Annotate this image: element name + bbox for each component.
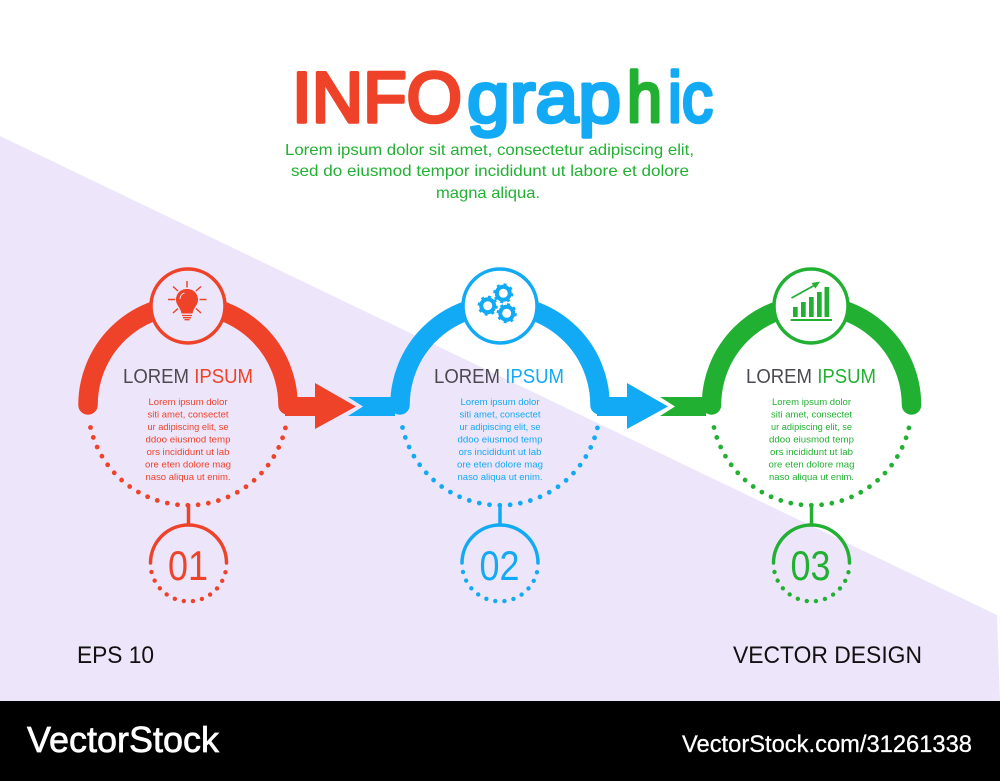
dotted lower arc xyxy=(90,428,286,505)
body text: ddoo eiusmod temp xyxy=(146,434,230,446)
arc: red thick semicircle xyxy=(88,305,288,405)
heading: lorem ipsum: LOREM IPSUM xyxy=(434,365,564,388)
number badge 02: 02 xyxy=(480,542,520,589)
footer bar xyxy=(0,701,1000,781)
dotted lower arc xyxy=(714,428,909,505)
number badge 02 xyxy=(462,504,538,601)
body text: siti amet, consectet xyxy=(460,410,541,420)
body text: Lorem ipsum dolor xyxy=(148,397,228,408)
body text: siti amet, consectet xyxy=(148,410,229,420)
panel: step 01 xyxy=(88,269,356,601)
number badge 01 xyxy=(150,504,226,601)
body text: ors incididunt ut lab xyxy=(458,447,542,458)
title: INFO xyxy=(292,59,462,138)
body text xyxy=(457,397,543,483)
arrow: blue head xyxy=(597,383,668,429)
arc: blue thick semicircle xyxy=(400,305,600,405)
subtitle text xyxy=(285,142,694,202)
title: ic xyxy=(668,59,713,138)
dotted lower arc xyxy=(402,428,598,505)
arrow: red xyxy=(285,383,356,429)
arrow: blue tail xyxy=(348,397,395,416)
title: grap xyxy=(467,59,621,138)
body text: Lorem ipsum dolor xyxy=(772,397,851,408)
body text: naso aliqua ut enim. xyxy=(146,472,230,483)
panel: step 02 xyxy=(348,269,668,601)
icon: growth chart xyxy=(774,269,848,343)
number badge 03 xyxy=(774,504,850,601)
body text: Lorem ipsum dolor xyxy=(460,397,540,408)
title xyxy=(292,59,713,138)
body text xyxy=(768,397,854,483)
subtitle text: magna aliqua. xyxy=(436,185,540,202)
label: EPS 10: EPS 10 xyxy=(77,642,154,669)
subtitle text: Lorem ipsum dolor sit amet, consectetur adipiscing elit, xyxy=(285,142,694,159)
icon: light bulb xyxy=(151,269,225,343)
body text xyxy=(145,397,231,483)
footer url text: VectorStock.com/31261338 xyxy=(682,731,972,758)
label: vector design: VECTOR DESIGN xyxy=(733,642,922,669)
number badge 01: 01 xyxy=(168,542,208,589)
number badge 03: 03 xyxy=(790,542,830,589)
body text: ur adipiscing elit, se xyxy=(771,422,852,433)
body text: naso aliqua ut enim. xyxy=(769,472,854,483)
body text: ors incididunt ut lab xyxy=(146,447,230,458)
title: h xyxy=(627,59,662,138)
footer logo text: VectorStock xyxy=(27,719,220,760)
heading: lorem ipsum: LOREM IPSUM xyxy=(123,365,253,388)
background: lavender diagonal panel xyxy=(0,136,1000,701)
icon: gears xyxy=(463,269,537,343)
body text: ur adipiscing elit, se xyxy=(460,422,540,433)
arrow: green tail xyxy=(660,397,706,416)
body text: ore eten dolore mag xyxy=(457,460,543,470)
subtitle text: sed do eiusmod tempor incididunt ut labore et dolore xyxy=(291,163,689,180)
body text: ddoo eiusmod temp xyxy=(458,434,542,446)
arc: green thick semicircle xyxy=(712,305,912,405)
heading: lorem ipsum: LOREM IPSUM xyxy=(746,365,876,388)
body text: ors incididunt ut lab xyxy=(770,447,853,458)
body text: ore eten dolore mag xyxy=(768,460,854,470)
body text: siti amet, consectet xyxy=(771,410,852,420)
body text: ore eten dolore mag xyxy=(145,460,231,470)
body text: naso aliqua ut enim. xyxy=(458,472,542,483)
body text: ur adipiscing elit, se xyxy=(148,422,228,433)
body text: ddoo eiusmod temp xyxy=(769,434,854,446)
panel: step 03 xyxy=(660,269,912,601)
